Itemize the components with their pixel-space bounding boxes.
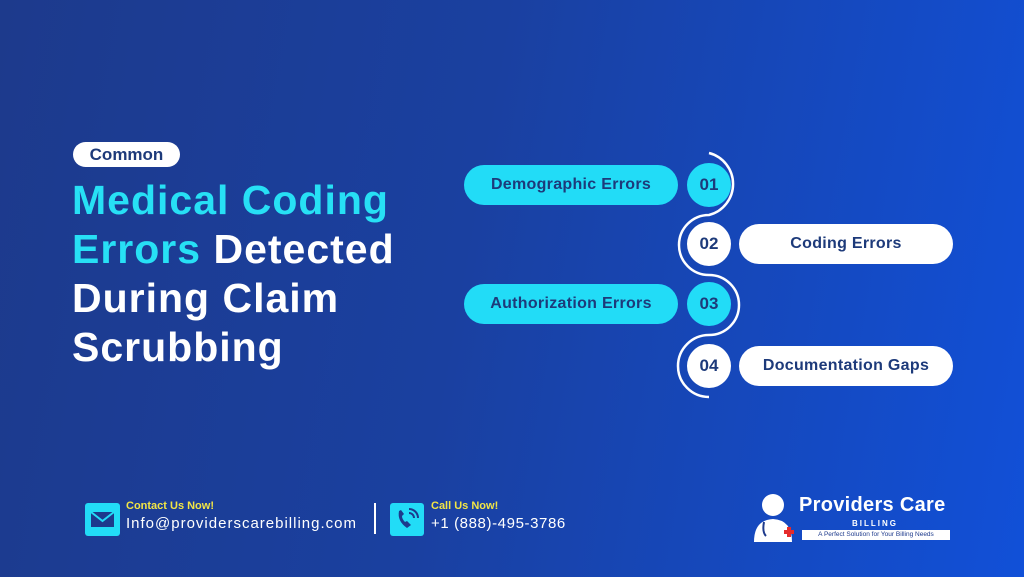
icon: phone bbox=[390, 503, 424, 536]
item 03: 03 bbox=[700, 294, 718, 313]
item 02 bbox=[687, 222, 953, 266]
item 01: Demographic Errors bbox=[491, 176, 651, 193]
item 04 bbox=[687, 344, 953, 388]
title: During Claim bbox=[72, 275, 339, 321]
logo: A Perfect Solution for Your Billing Needs bbox=[818, 531, 934, 538]
title: Scrubbing bbox=[72, 324, 284, 370]
tag: Common: Common bbox=[90, 144, 163, 164]
item 03: Authorization Errors bbox=[490, 295, 652, 312]
icon: envelope bbox=[85, 503, 120, 536]
title bbox=[72, 177, 395, 370]
title: Medical Coding bbox=[72, 177, 389, 223]
item 02: 02 bbox=[700, 234, 718, 253]
item 03 bbox=[464, 282, 731, 326]
contact email: Info@providerscarebilling.com bbox=[126, 515, 357, 532]
item 01: 01 bbox=[700, 175, 718, 194]
tag: Common bbox=[73, 142, 180, 167]
contact email: Contact Us Now! bbox=[126, 500, 214, 512]
contact email bbox=[85, 500, 357, 536]
item 02: Coding Errors bbox=[790, 235, 902, 252]
logo: Providers Care bbox=[799, 494, 946, 516]
contact phone bbox=[390, 500, 566, 536]
title: Errors Detected bbox=[72, 226, 395, 272]
logo: BILLING bbox=[852, 519, 898, 528]
contact phone: +1 (888)-495-3786 bbox=[431, 515, 566, 532]
logo bbox=[754, 494, 950, 542]
item 04: 04 bbox=[700, 356, 718, 375]
contact phone: Call Us Now! bbox=[431, 500, 498, 512]
item 01 bbox=[464, 163, 731, 207]
icon: doctor bbox=[754, 494, 794, 542]
item 04: Documentation Gaps bbox=[763, 357, 929, 374]
